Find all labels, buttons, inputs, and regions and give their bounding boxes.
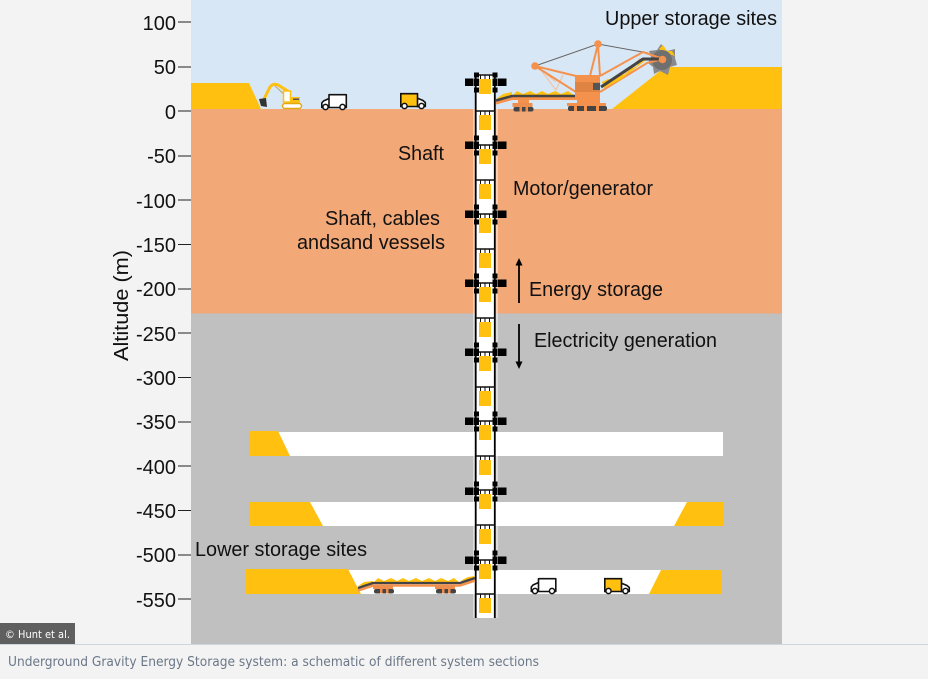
upper storage pile right: [612, 67, 782, 109]
label: shaft: Shaft: [398, 143, 444, 165]
y axis: -300: [136, 368, 176, 390]
axis title: Altitude (m): [111, 250, 133, 361]
label: shaft cables and vessels: [297, 208, 445, 254]
y axis: 50: [154, 57, 176, 79]
panel: sky: [191, 0, 782, 110]
y axis: -450: [136, 501, 176, 523]
icon: excavator: [259, 84, 302, 108]
panel: grey rock layer: [191, 314, 782, 644]
motor generators: [465, 72, 506, 570]
label: energy storage: Energy storage: [529, 279, 663, 301]
y axis: -550: [136, 590, 176, 612]
label: motor generator: Motor/generator: [513, 178, 653, 200]
y axis: [136, 13, 191, 612]
shaft: [465, 72, 506, 618]
icon: yellow truck lower: [605, 579, 629, 594]
arrow: electricity generation down: [516, 324, 522, 369]
y axis: -350: [136, 412, 176, 434]
y axis: -400: [136, 457, 176, 479]
y axis: -250: [136, 324, 176, 346]
vessels in shaft: [476, 75, 495, 613]
icon: bucket wheel excavator: [496, 40, 677, 112]
copyright badge: © Hunt et al.: [5, 628, 70, 641]
upper storage pile left: [191, 83, 261, 109]
lower storage chamber 2: [249, 502, 723, 526]
label: electricity generation: Electricity generation: [534, 330, 717, 352]
caption: Underground Gravity Energy Storage system: a schematic of different system sections: [8, 655, 539, 670]
y axis: 0: [165, 102, 176, 124]
label: upper storage sites: Upper storage sites: [605, 8, 777, 30]
footer line: [0, 644, 928, 645]
icon: yellow truck upper: [401, 94, 425, 109]
y axis: -500: [136, 545, 176, 567]
label: shaft cables and vessels: Shaft, cables: [325, 208, 440, 230]
lower storage chamber 3: [246, 569, 722, 594]
y axis: -50: [147, 146, 176, 168]
panel: orange rock layer: [191, 109, 782, 314]
y axis: -150: [136, 235, 176, 257]
lower storage chamber 1: [249, 431, 723, 456]
label: shaft cables and vessels: andsand vessels: [297, 232, 445, 254]
label: lower storage sites: Lower storage sites: [195, 539, 367, 561]
icon: white truck lower: [531, 579, 556, 594]
copyright badge: [0, 623, 75, 644]
arrow: energy storage up: [516, 258, 522, 303]
icon: lower conveyor: [358, 576, 475, 594]
y axis: -200: [136, 279, 176, 301]
y axis: -100: [136, 191, 176, 213]
icon: white truck upper: [322, 95, 346, 110]
y axis: 100: [143, 13, 176, 35]
